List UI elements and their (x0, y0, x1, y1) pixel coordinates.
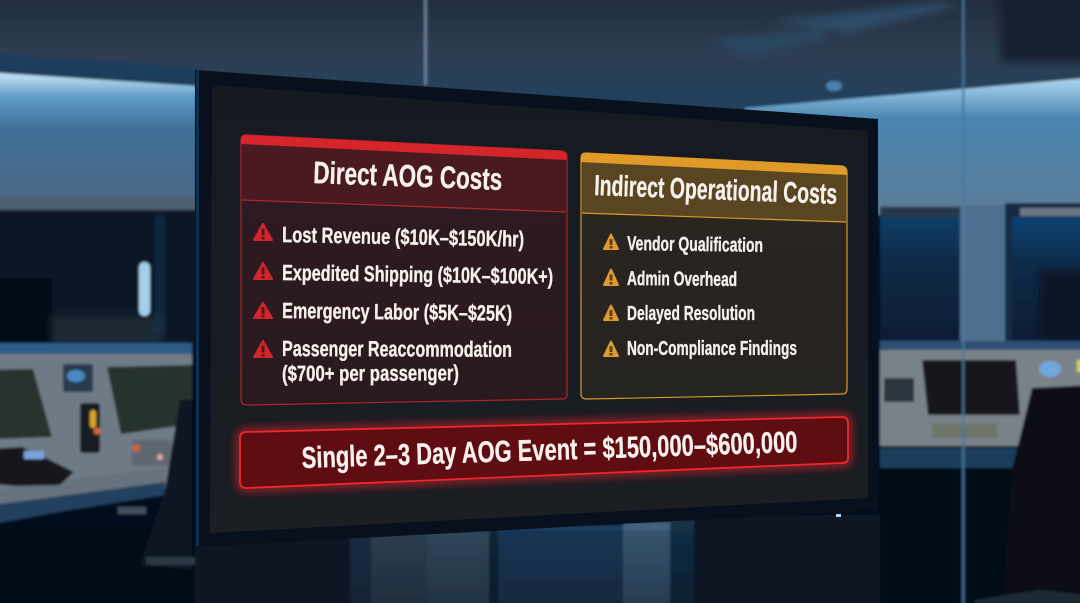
panel: indirect operational costs (581, 153, 847, 399)
callout: total event cost banner (240, 417, 848, 488)
item: emergency labor: Emergency Labor ($5K–$25K) (282, 298, 512, 326)
chair (140, 400, 192, 570)
item: expedited shipping: Expedited Shipping ($10K–$100K+) (282, 260, 553, 289)
item: lost revenue (254, 222, 524, 252)
item: vendor qualification: Vendor Qualification (627, 233, 763, 257)
right chair (1000, 384, 1080, 603)
heading: Direct AOG Costs (313, 155, 503, 197)
item: admin overhead: Admin Overhead (627, 268, 737, 291)
item: delayed resolution: Delayed Resolution (627, 303, 755, 325)
left lit wall (0, 71, 196, 200)
panel: direct AOG costs (241, 135, 567, 405)
item: expedited shipping (254, 260, 553, 289)
monitor bezel (195, 70, 878, 547)
panel header (582, 160, 846, 222)
item: delayed resolution (604, 303, 755, 325)
power LED (836, 514, 841, 517)
ceiling (0, 0, 1080, 110)
item: non-compliance findings: Non-Compliance Findings (627, 338, 797, 360)
ceiling panels (705, 0, 1080, 62)
header rule (242, 200, 566, 212)
callout: total event cost banner: Single 2–3 Day AOG Event = $150,000–$600,000 (301, 426, 798, 475)
right lit wall (745, 76, 1080, 215)
stand and floor behind monitor (195, 515, 880, 603)
item: vendor qualification (604, 233, 763, 257)
item: lost revenue: Lost Revenue ($10K–$150K/hr) (282, 222, 524, 252)
left window (0, 196, 196, 344)
heading: Indirect Operational Costs (594, 170, 838, 211)
header rule (582, 213, 846, 222)
right windows and pillar (880, 203, 1080, 350)
item: passenger reaccommodation: Passenger Reaccommodation (282, 336, 512, 362)
telephone (0, 447, 74, 486)
panel body (241, 135, 567, 405)
ceiling lamp (826, 81, 842, 91)
item: admin overhead (604, 268, 737, 291)
item: passenger reaccommodation: ($700+ per passenger) (282, 360, 459, 386)
panel body (581, 153, 847, 399)
item: non-compliance findings (604, 338, 797, 360)
glass partition lines (424, 0, 964, 603)
right console (880, 350, 1080, 603)
monitor (195, 70, 878, 547)
monitor screen (210, 85, 868, 533)
item: emergency labor (254, 298, 512, 326)
top accent bar (581, 153, 847, 175)
top accent bar (241, 135, 567, 160)
item: passenger reaccommodation (254, 336, 512, 386)
panel header (242, 141, 566, 212)
left console (0, 343, 196, 603)
